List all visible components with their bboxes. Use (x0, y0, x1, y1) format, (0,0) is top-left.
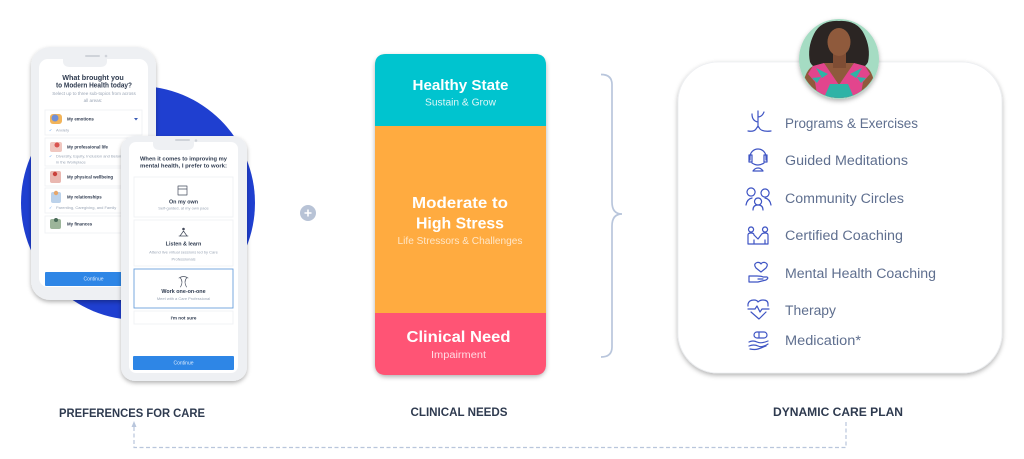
phone: what brought you: Select up to three sub-topics from across (52, 91, 136, 96)
heading: clinical needs: CLINICAL NEEDS (410, 405, 508, 419)
phone: how to work: I'm not sure (171, 316, 197, 320)
phone: how to work: Attend live virtual sessions led by Care (149, 250, 219, 254)
item: guided meditations: Guided Meditations (785, 153, 908, 168)
panel: dynamic care plan (678, 19, 1002, 373)
phone: how to work: Professionals (171, 256, 196, 262)
phone: what brought you: Anxiety (56, 128, 69, 132)
phone: how to work: On my own (169, 200, 198, 206)
phone: what brought you: ✓ (49, 128, 52, 132)
brace (601, 74, 622, 357)
phone: what brought you: What brought you (62, 73, 124, 82)
item: programs and exercises (748, 111, 918, 131)
phone: what brought you: My finances (67, 222, 93, 226)
phone: what brought you: Diversity, Equity, Inclusion and Belonging (56, 154, 129, 158)
card (678, 62, 1002, 373)
item: programs and exercises: Programs & Exercises (785, 116, 918, 131)
item: community circles (746, 188, 904, 210)
phone: how to work: Meet with a Care Professional (157, 296, 210, 301)
band: healthy state: Healthy State (412, 77, 508, 94)
item: guided meditations (749, 149, 908, 171)
band: clinical need: Impairment (431, 350, 486, 361)
band: moderate to high stress: High Stress (416, 216, 504, 232)
phone: what brought you: ✓ (49, 154, 52, 158)
band: moderate to high stress: Life Stressors & Challenges (398, 236, 522, 247)
phone: what brought you: Continue (83, 276, 104, 282)
band: clinical need: Clinical Need (406, 329, 510, 346)
phone: how to work: Self-guided, at my own pace (158, 206, 210, 210)
phone: how to work (121, 136, 247, 381)
item: therapy: Therapy (785, 303, 836, 318)
item: medication (749, 332, 862, 350)
band: clinical need (375, 313, 546, 375)
item: mental health coaching: Mental Health Coaching (785, 266, 936, 281)
band: moderate to high stress: Moderate to (412, 195, 508, 212)
phone: what brought you: in the Workplace (56, 160, 86, 164)
phone: what brought you: My professional life (67, 144, 109, 150)
icon: plus (300, 205, 316, 221)
phone: what brought you: My physical wellbeing (67, 174, 113, 180)
item: certified coaching: Certified Coaching (785, 228, 903, 243)
band: moderate to high stress (398, 195, 522, 247)
phone: what brought you: Parenting, Caregiving, and Family (56, 205, 116, 210)
phone: how to work: Continue (173, 360, 194, 366)
phone: what brought you (31, 47, 156, 300)
blue background circle (21, 86, 255, 320)
item: medication: Medication* (785, 333, 862, 348)
phone: how to work: Work one-on-one (161, 289, 206, 295)
item: community circles: Community Circles (785, 191, 904, 206)
band: healthy state (375, 54, 546, 126)
heading: dynamic care plan: DYNAMIC CARE PLAN (773, 405, 903, 419)
avatar: woman portrait (799, 19, 879, 100)
phone: how to work: When it comes to improving my (140, 156, 228, 162)
phone: what brought you: all areas: (84, 98, 102, 103)
phone: how to work: mental health, I prefer to work: (140, 164, 227, 170)
panel: clinical needs column (375, 54, 546, 375)
phone: what brought you: My emotions (67, 116, 94, 122)
item: therapy (748, 300, 836, 319)
band: healthy state: Sustain & Grow (425, 98, 497, 108)
heading: preferences for care: PREFERENCES FOR CARE (59, 406, 205, 420)
item: certified coaching (748, 227, 903, 244)
phone: what brought you: My relationships (67, 194, 102, 200)
phone: how to work: Listen & learn (166, 242, 201, 248)
phone: what brought you: ✓ (49, 205, 52, 210)
item: mental health coaching (749, 262, 936, 282)
panel: preferences for care (21, 47, 255, 381)
arrow: feedback loop (132, 421, 846, 448)
phone: what brought you: to Modern Health today? (56, 80, 132, 90)
